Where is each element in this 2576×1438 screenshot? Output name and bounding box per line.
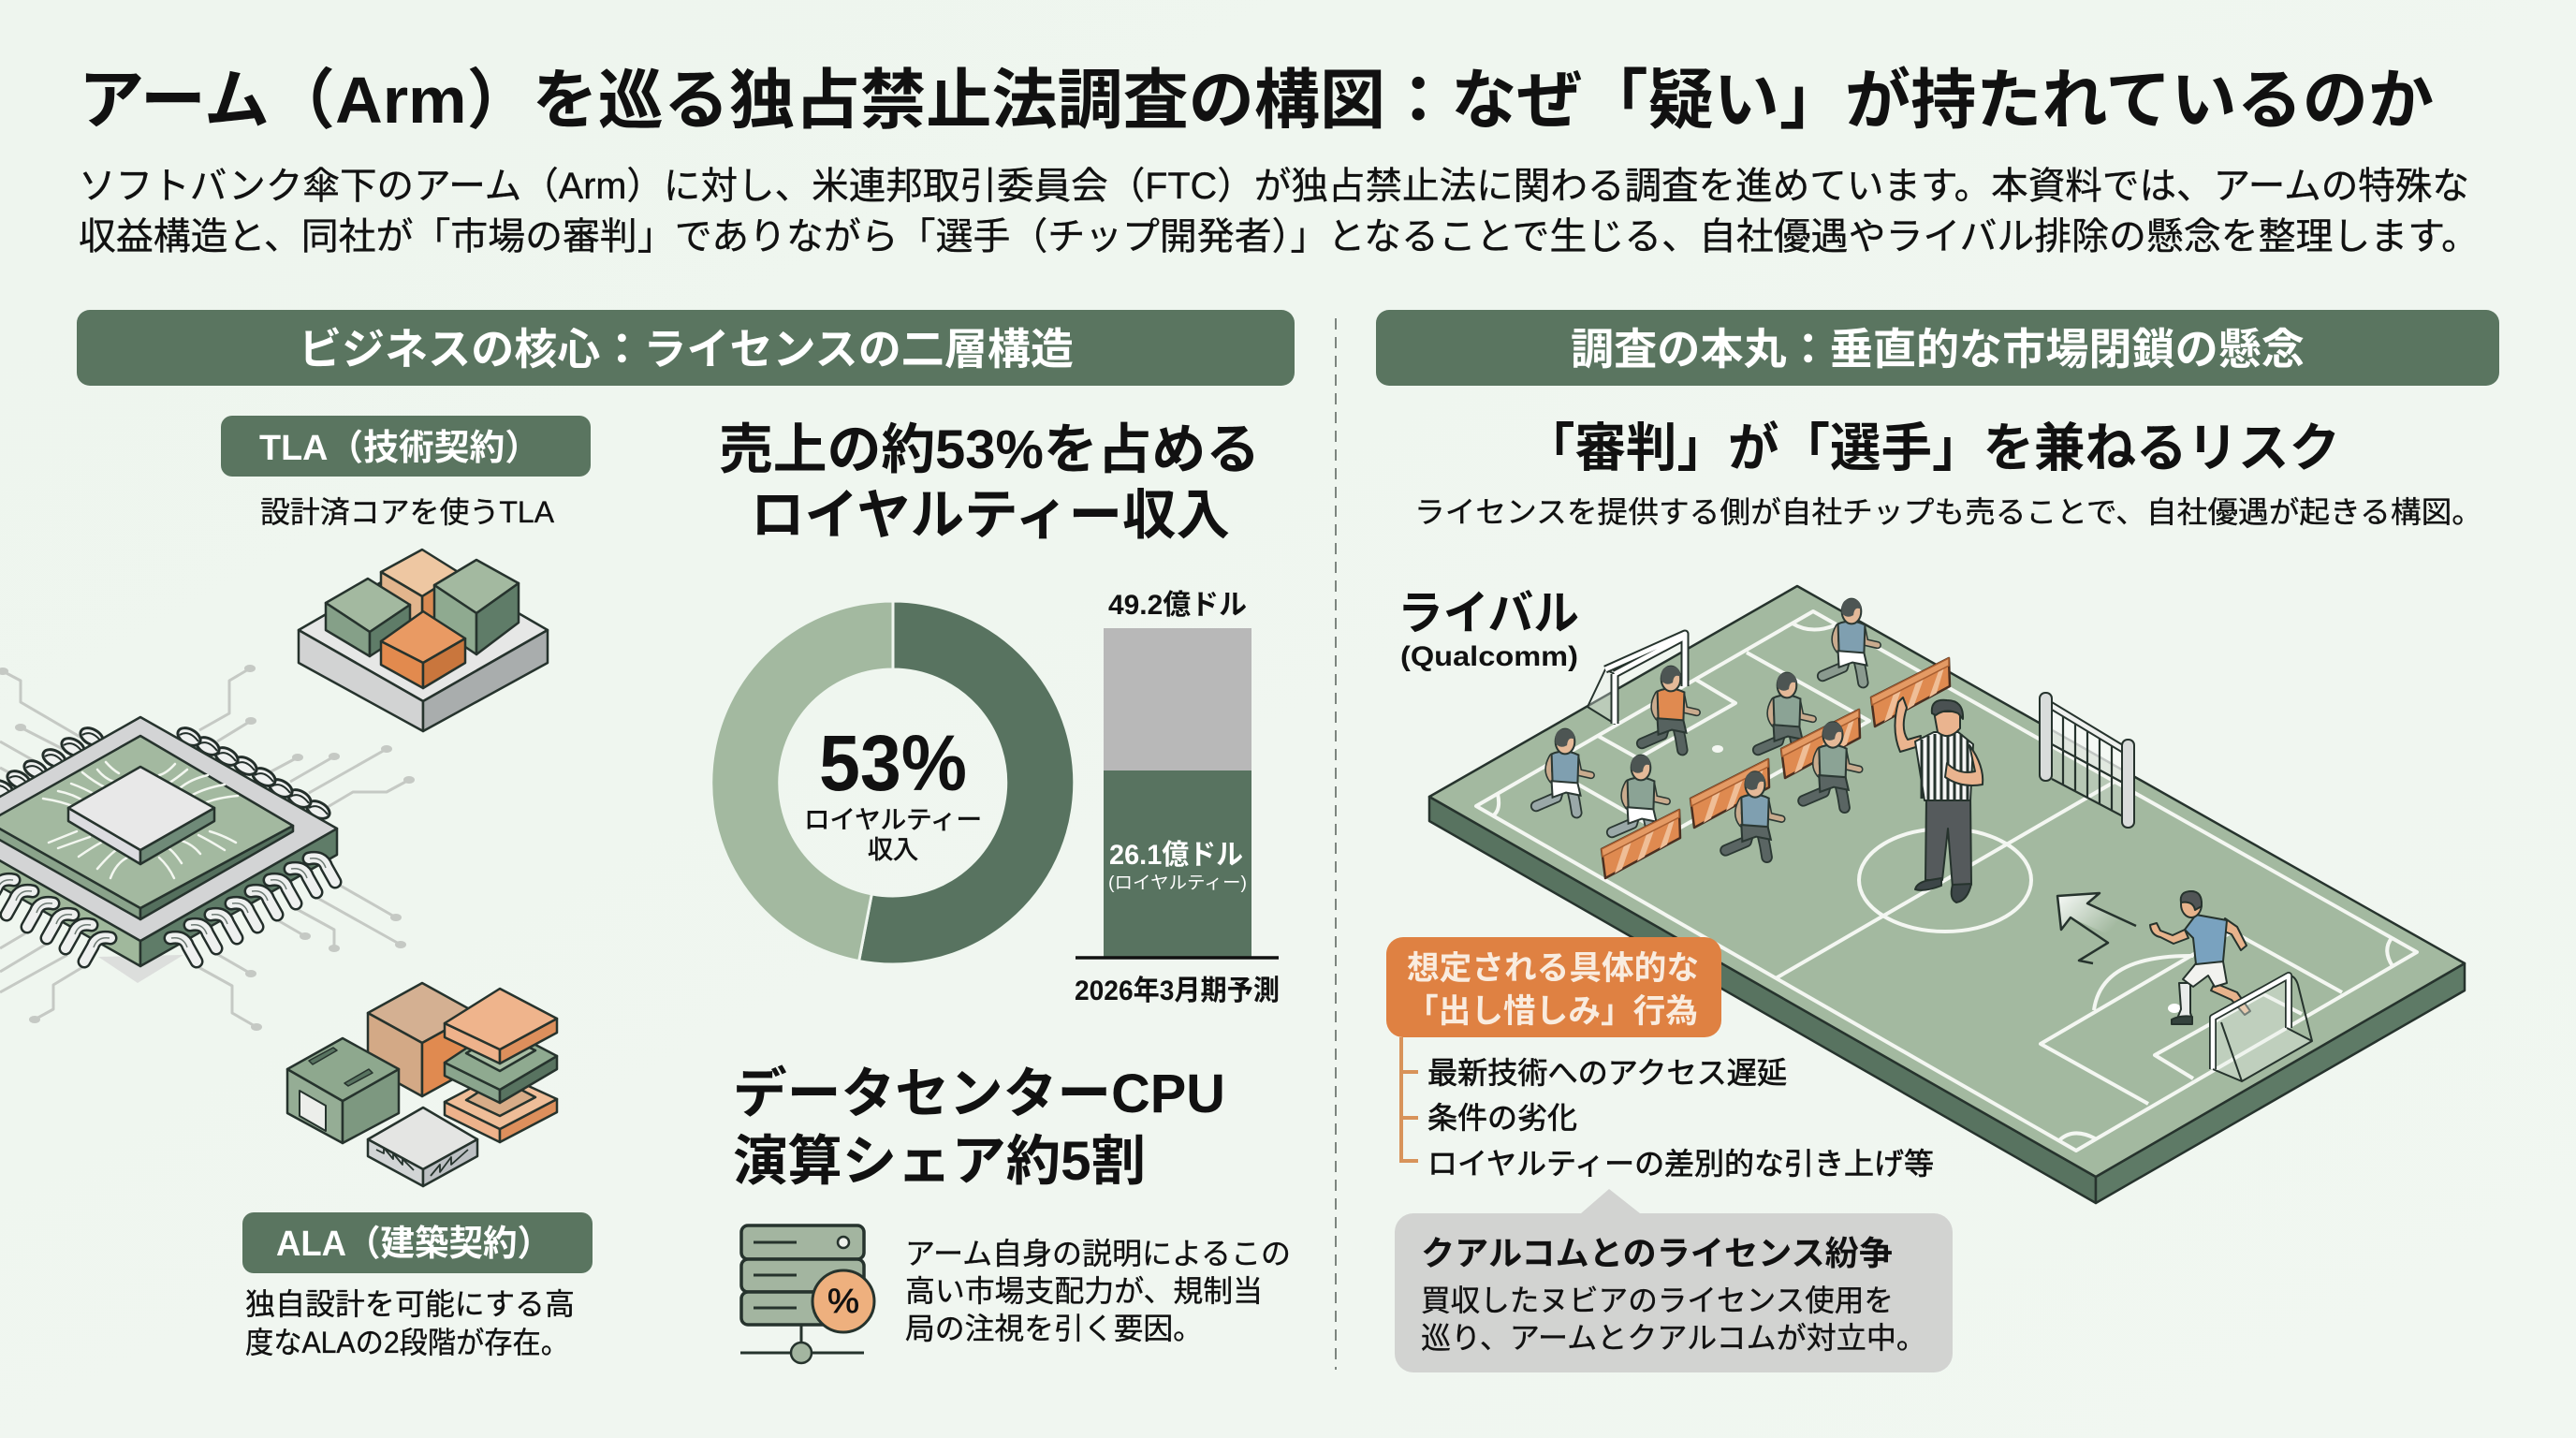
illustration: isometric soccer field [1429,586,2465,1203]
ALA label [242,1212,593,1273]
TLA label: TLA（技術契約） [259,429,540,468]
fence goal [2040,693,2134,828]
donut chart [711,601,1075,964]
top leads [0,725,332,822]
movement arrow [2057,893,2136,963]
player: pushing barrier 3 [1803,722,1859,808]
ALA label: ALA（建築契約） [276,1225,551,1264]
icon: central processor chip [0,665,415,1031]
rival label: (Qualcomm) [1400,641,1578,672]
icon: server with percent [740,1225,874,1363]
rival label: ライバル [1398,587,1579,639]
heading: data center CPU share [733,1064,1225,1192]
intro paragraph: 収益構造と、同社が「市場の審判」でありながら「選手（チップ開発者）」となることで生じる、自社優遇やライバル排除の懸念を整理します。 [79,216,2479,257]
barrier 3 [1781,710,1860,778]
right section header [1376,310,2499,386]
market share explanation: 局の注視を引く要因。 [905,1312,1203,1345]
title: アーム（Arm）を巡る独占禁止法調査の構図：なぜ「疑い」が持たれているのか [79,64,2434,137]
player: rival left [1536,729,1591,813]
callout: Qualcomm license dispute: クアルコムとのライセンス紛争 [1421,1234,1893,1272]
callout: withholding conduct: 「出し惜しみ」行為 [1406,993,1698,1030]
callout: withholding conduct [1386,937,1721,1037]
list: withholding examples [1401,1037,1934,1181]
left section header: ビジネスの核心：ライセンスの二層構造 [299,325,1074,374]
callout: Qualcomm license dispute [1395,1189,1953,1372]
market share explanation: 高い市場支配力が、規制当 [905,1274,1263,1308]
heading: data center CPU share: 演算シェア約5割 [733,1131,1146,1192]
list: withholding examples: 条件の劣化 [1427,1101,1577,1135]
player: rival goalkeeper [1642,667,1697,750]
rival label [1398,587,1579,672]
player: rival midfield [1758,673,1813,756]
ALA description: 独自設計を可能にする高 [245,1287,575,1321]
stacked bar chart: 49.2億ドル [1108,590,1247,621]
icon: TLA core blocks [299,550,548,731]
chip die [68,767,214,864]
list: withholding examples: ロイヤルティーの差別的な引き上げ等 [1427,1147,1934,1181]
callout: withholding conduct: 想定される具体的な [1407,950,1699,987]
risk description: ライセンスを提供する側が自社チップも売ることで、自社優遇が起きる構図。 [1414,495,2482,529]
barrier 2 [1690,759,1769,828]
player: pushing barrier 2 [1726,771,1781,858]
market share explanation: アーム自身の説明によるこの [905,1237,1291,1270]
chip package [0,717,337,966]
barrier 1 [1602,810,1680,878]
intro paragraph [79,166,2479,257]
player: rival behind barrier [1612,756,1667,839]
player: rival top [1822,599,1878,682]
intro paragraph: ソフトバンク傘下のアーム（Arm）に対し、米連邦取引委員会（FTC）が独占禁止法に関わる調査を進めています。本資料では、アームの特殊な [79,166,2469,207]
referee [1895,697,1983,902]
left section header [77,310,1295,386]
pitch markings [1476,611,2417,1151]
heading: referee and player risk: 「審判」が「選手」を兼ねるリスク [1524,418,2340,477]
field slab [1429,586,2465,1203]
ALA description [245,1287,575,1359]
ALA description: 度なALAの2段階が存在。 [245,1326,569,1359]
icon: ALA custom blocks [287,983,557,1186]
divider [1335,318,1337,1370]
heading: data center CPU share: データセンターCPU [733,1064,1225,1124]
heading: royalty revenue: 売上の約53%を占める [719,419,1260,480]
back goal [1588,634,1685,724]
ball [2168,1004,2181,1013]
heading: royalty revenue [719,419,1260,546]
circuit traces [0,665,415,1031]
donut chart: 収入 [868,836,918,864]
stacked bar chart: 2026年3月期予測 [1075,976,1280,1006]
market share explanation [905,1237,1291,1345]
TLA label [221,416,591,477]
donut chart: ロイヤルティー [804,806,982,834]
barrier 4 [1871,658,1950,726]
callout: Qualcomm license dispute: 巡り、アームとクアルコムが対立中。 [1421,1321,1926,1355]
striker [2150,891,2250,1024]
front goal [2213,976,2312,1081]
bottom leads [0,858,335,961]
list: withholding examples: 最新技術へのアクセス遅延 [1427,1056,1787,1090]
stacked bar chart [1075,590,1280,1006]
heading: royalty revenue: ロイヤルティー収入 [751,485,1230,546]
callout: Qualcomm license dispute: 買収したヌビアのライセンス使用を [1421,1284,1894,1317]
stacked bar chart: (ロイヤルティー) [1108,873,1247,893]
icon: server with percent: % [827,1282,859,1320]
donut chart: 53% [819,719,967,807]
stacked bar chart: 26.1億ドル [1109,840,1243,871]
right section header: 調査の本丸：垂直的な市場閉鎖の懸念 [1571,325,2305,374]
traces on substrate [43,762,238,878]
TLA description: 設計済コアを使うTLA [260,495,555,529]
